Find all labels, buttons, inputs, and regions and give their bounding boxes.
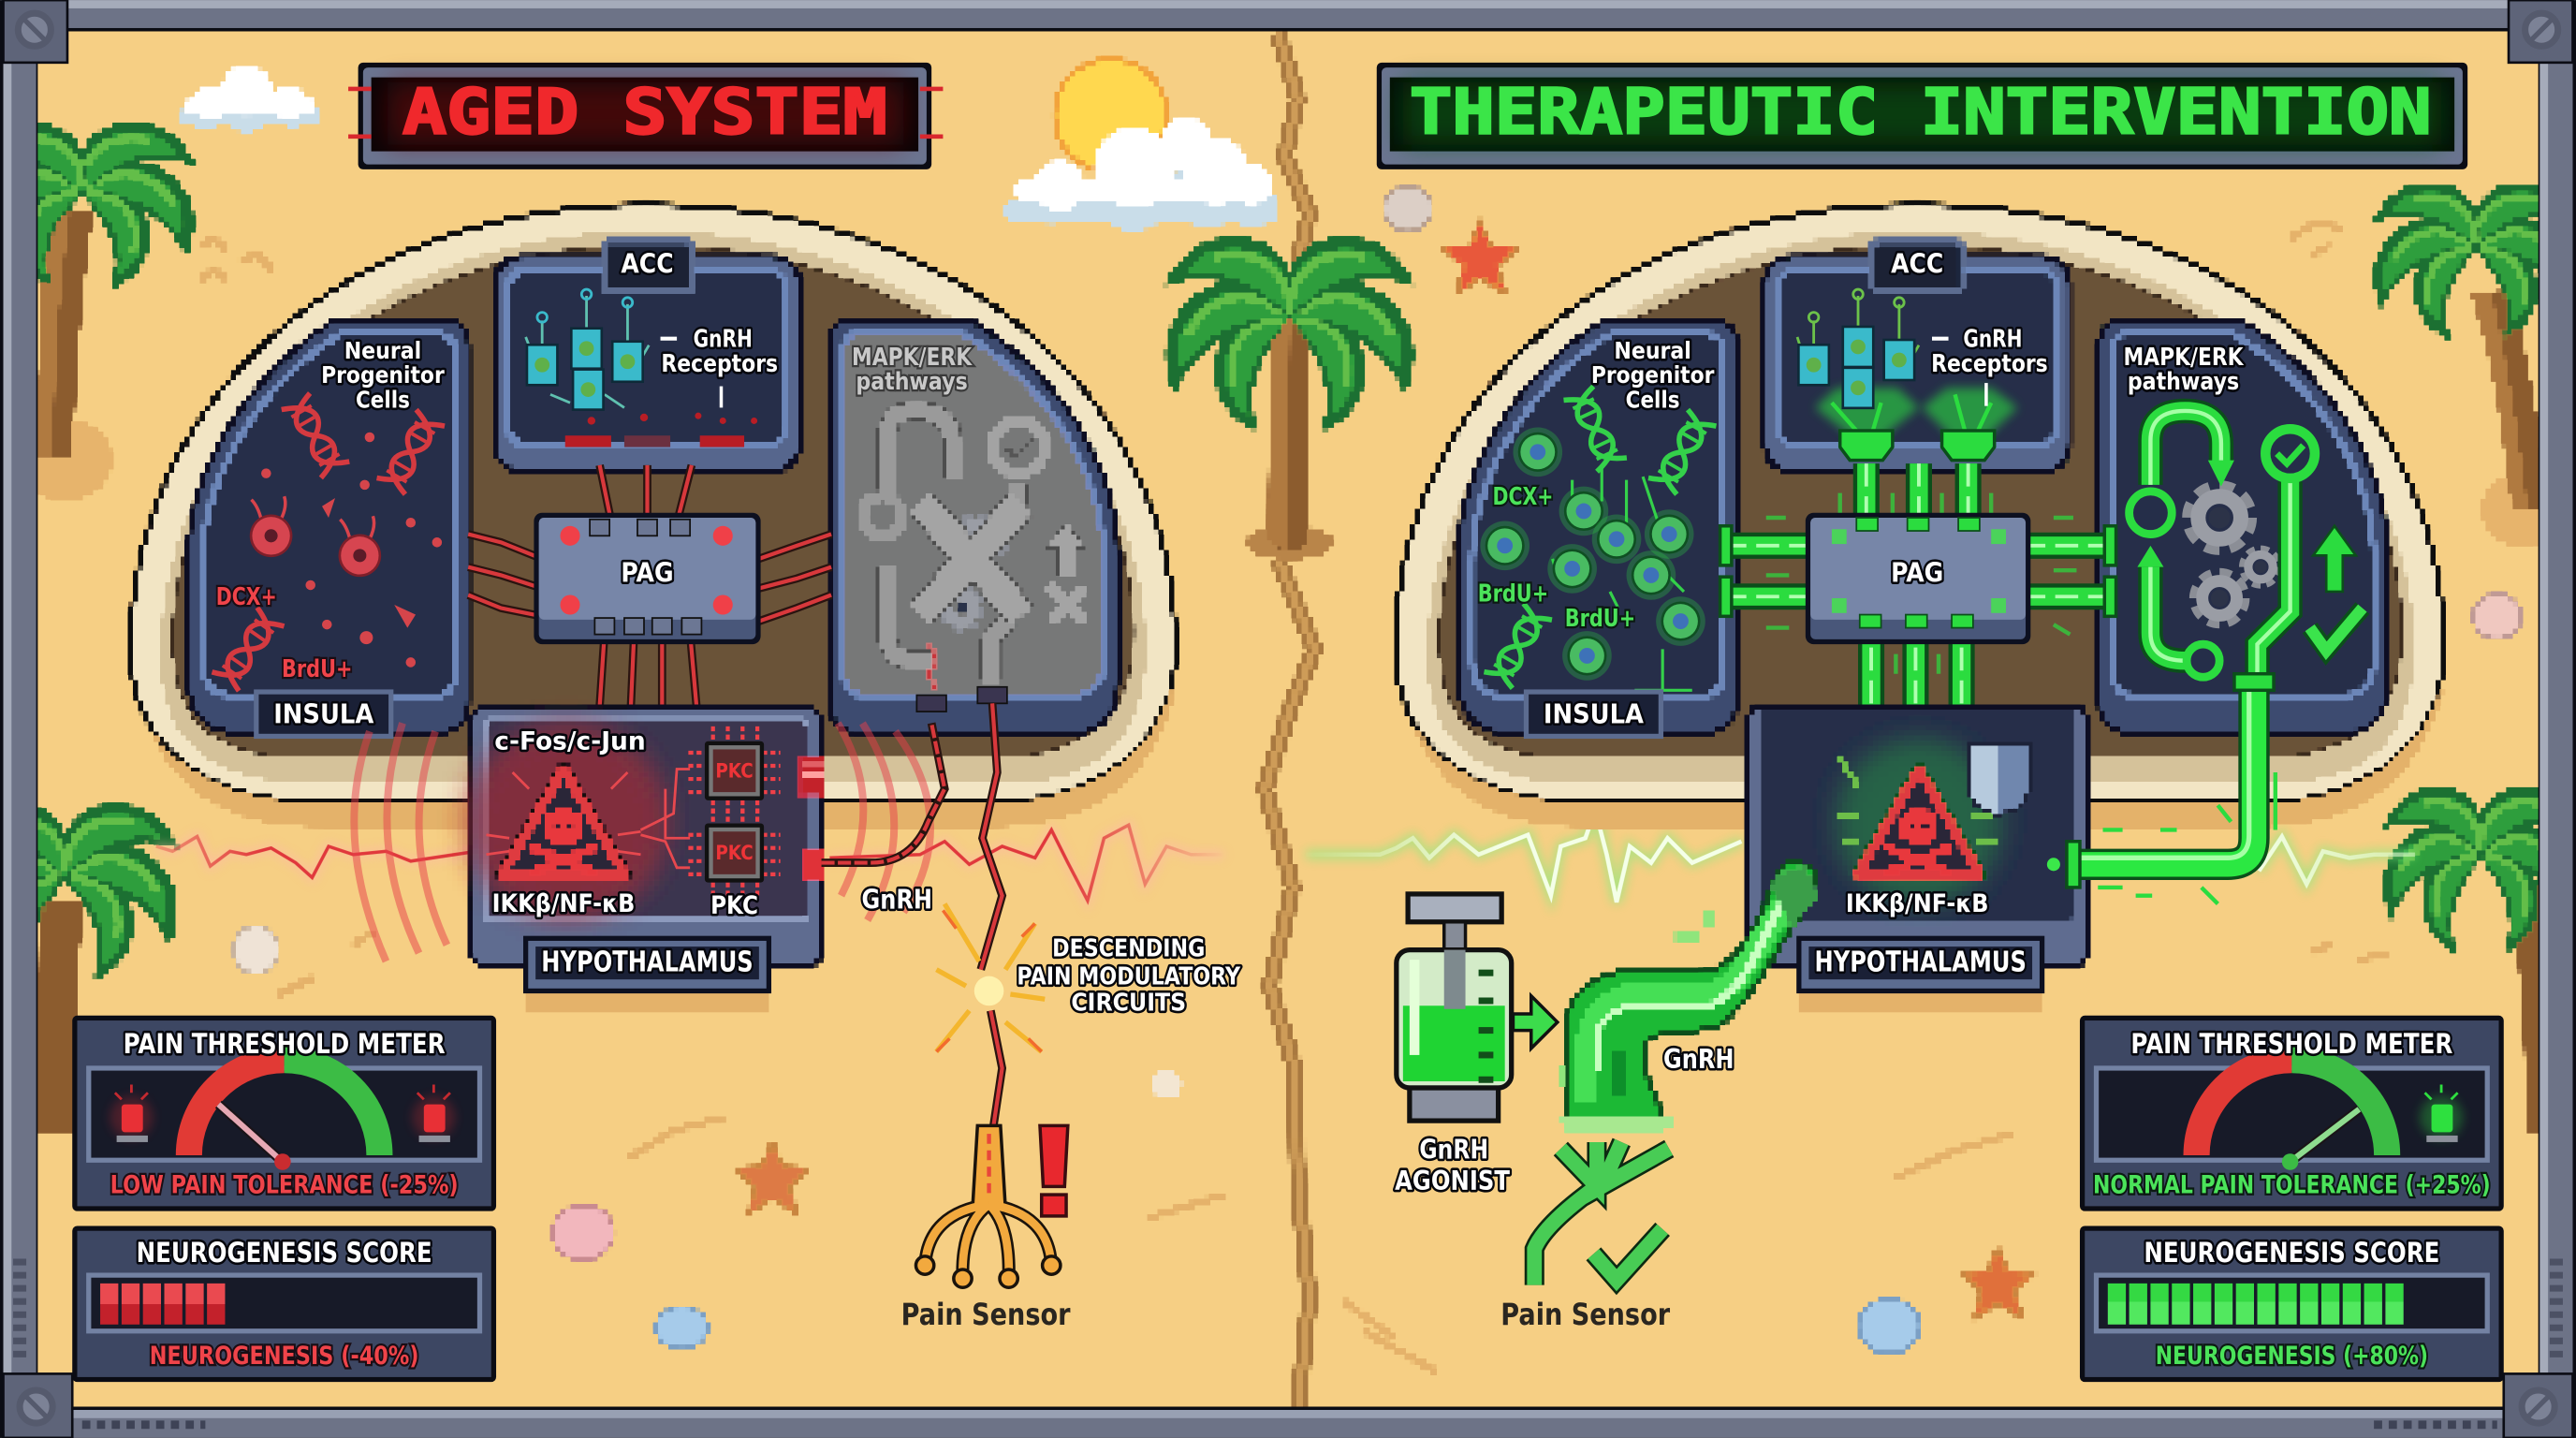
panel: pain threshold meter restored: PAIN THRESHOLD METER <box>2130 1028 2452 1060</box>
panel: ACC aged: GnRH <box>694 324 753 352</box>
panel: Hypothalamus aged: PKC <box>715 841 754 864</box>
icon: aged pain sensor <box>915 1125 1061 1287</box>
panel: aged brain dome <box>131 206 1175 827</box>
panel: pain threshold meter aged: LOW PAIN TOLERANCE (-25%) <box>110 1171 459 1199</box>
panel: ACC restored <box>1763 242 2071 474</box>
wiring: aged circuit between regions <box>468 465 831 707</box>
panel: Insula restored <box>1459 320 1736 736</box>
panel: Hypothalamus restored: IKKβ/NF-κB <box>1846 890 1989 918</box>
panel: Insula aged: INSULA <box>273 698 374 729</box>
panel: MAPK/ERK inactive <box>829 320 1117 733</box>
icon: GnRH agonist syringe <box>1397 894 1558 1121</box>
panel: neurogenesis score restored: NEUROGENESIS (+80%) <box>2156 1343 2428 1371</box>
descending pain circuit wire with break <box>936 703 1045 1134</box>
label: healthy pain sensor: Pain Sensor <box>1500 1299 1670 1332</box>
panel: Hypothalamus aged: HYPOTHALAMUS <box>541 946 754 978</box>
pulse waves: aged hypothalamus <box>354 723 930 961</box>
panel: Hypothalamus aged: c-Fos/c-Jun <box>494 727 646 756</box>
palm tree: top left <box>0 99 198 500</box>
label: aged pain sensor: Pain Sensor <box>901 1299 1071 1332</box>
title: aged system: AGED SYSTEM <box>402 75 887 148</box>
panel: Insula aged <box>189 320 468 736</box>
EKG signal: aged <box>156 825 1224 901</box>
panel: ACC restored: ACC <box>1891 248 1943 279</box>
GnRH wire: aged <box>822 687 1007 863</box>
panel: Insula aged: Cells <box>356 386 410 413</box>
label: GnRH agonist: AGONIST <box>1395 1166 1510 1196</box>
panel: Hypothalamus restored <box>1745 703 2089 1012</box>
pipes: restored circuit between regions <box>1720 463 2116 707</box>
title: therapeutic intervention: THERAPEUTIC INTERVENTION <box>1410 75 2432 148</box>
panel: Hypothalamus aged <box>465 703 825 1012</box>
green GnRH flow into hypothalamus <box>1558 862 1817 1132</box>
palm tree: top right <box>2369 161 2576 546</box>
panel: MAPK/ERK inactive: MAPK/ERK <box>852 343 973 371</box>
panel: ACC aged: ACC <box>621 248 674 279</box>
panel: PAG restored: PAG <box>1891 557 1943 588</box>
palm tree: lower right <box>2379 764 2576 1131</box>
panel: Insula restored: Progenitor <box>1591 361 1715 389</box>
GnRH label: aged: GnRH <box>862 885 932 916</box>
panel: Insula restored: Cells <box>1626 386 1680 413</box>
label: GnRH agonist <box>1395 1134 1510 1196</box>
label: descending pain modulatory circuits: CIRCUITS <box>1071 989 1186 1017</box>
panel: PAG restored <box>1806 513 2030 644</box>
panel: Hypothalamus aged: IKKβ/NF-κB <box>492 890 635 918</box>
panel: Insula restored: BrdU+ <box>1478 580 1548 608</box>
panel: Hypothalamus aged: PKC <box>710 892 758 920</box>
panel: restored brain dome <box>1397 206 2443 827</box>
label: descending pain modulatory circuits <box>1017 934 1241 1017</box>
panel: neurogenesis score aged: NEUROGENESIS SCORE <box>137 1237 432 1269</box>
panel: neurogenesis score restored: NEUROGENESIS SCORE <box>2144 1237 2439 1269</box>
panel: ACC restored: Receptors <box>1931 349 2048 377</box>
palm tree: centre <box>1160 210 1419 559</box>
panel: Insula aged: Neural <box>344 337 421 364</box>
panel: Insula restored: INSULA <box>1544 698 1644 729</box>
panel: pain threshold meter restored <box>2080 1016 2504 1211</box>
panel: MAPK/ERK active <box>2100 320 2387 733</box>
panel: neurogenesis score aged <box>72 1225 496 1382</box>
panel: neurogenesis score restored <box>2080 1225 2504 1382</box>
panel: ACC restored: GnRH <box>1963 324 2023 352</box>
panel: Hypothalamus restored: HYPOTHALAMUS <box>1815 946 2027 978</box>
icon: alert exclamation mark <box>1040 1125 1068 1216</box>
label: descending pain modulatory circuits: DESCENDING <box>1052 934 1205 962</box>
panel: ACC aged <box>493 242 801 474</box>
panel: pain threshold meter aged: PAIN THRESHOLD METER <box>124 1028 446 1060</box>
panel: ACC aged: Receptors <box>661 349 778 377</box>
panel: pain threshold meter restored: NORMAL PAIN TOLERANCE (+25%) <box>2093 1171 2491 1199</box>
panel: Insula aged: BrdU+ <box>282 654 352 682</box>
panel: PAG aged <box>534 513 761 644</box>
label: GnRH agonist: GnRH <box>1419 1134 1488 1165</box>
panel: Insula aged: Progenitor <box>321 361 446 389</box>
EKG signal: restored <box>1306 810 2415 902</box>
panel: PAG aged: PAG <box>621 557 674 588</box>
palm tree: lower left <box>0 779 183 1131</box>
label: GnRH restored: GnRH <box>1663 1044 1734 1075</box>
title: therapeutic intervention <box>1377 63 2467 169</box>
panel: MAPK/ERK active: MAPK/ERK <box>2123 343 2245 371</box>
panel: MAPK/ERK active: pathways <box>2128 367 2239 395</box>
panel: neurogenesis score aged: NEUROGENESIS (-40%) <box>150 1343 419 1371</box>
label: descending pain modulatory circuits: PAIN MODULATORY <box>1017 961 1241 990</box>
panel: Insula aged: DCX+ <box>216 582 277 610</box>
panel: Insula restored: BrdU+ <box>1565 604 1635 632</box>
panel: Hypothalamus aged: PKC <box>715 758 754 782</box>
pipe: MAPK output to hypothalamus <box>2047 674 2276 903</box>
panel: Insula restored: Neural <box>1614 337 1691 364</box>
icon: healthy pain sensor <box>1534 1142 1669 1285</box>
panel: pain threshold meter aged <box>72 1016 496 1211</box>
panel: Insula restored: DCX+ <box>1493 482 1553 510</box>
panel: MAPK/ERK inactive: pathways <box>856 367 968 395</box>
title: aged system <box>348 63 943 169</box>
